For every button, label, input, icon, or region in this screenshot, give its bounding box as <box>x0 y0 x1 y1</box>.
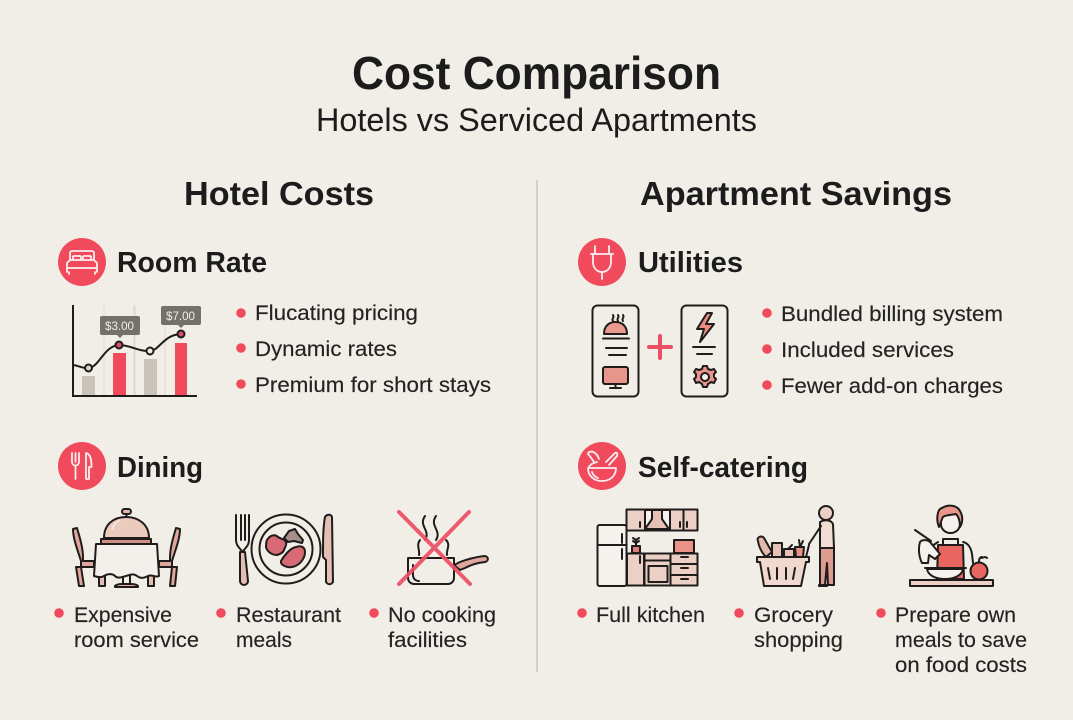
icon: mixing bowl <box>578 442 626 490</box>
icon: room service table <box>73 509 180 587</box>
icon: bed <box>58 238 106 286</box>
list: utilities points: Bundled billing system <box>781 302 1003 326</box>
list: room rate points: Flucating pricing <box>255 301 418 325</box>
icon: cutlery <box>58 442 106 490</box>
icon: crossed out pan <box>399 512 488 584</box>
heading: apartment savings: Apartment Savings <box>640 175 952 212</box>
panel: self-catering <box>577 442 1027 677</box>
chart: fluctuating price: $7.00 <box>166 309 195 323</box>
list: room rate points: Dynamic rates <box>255 337 397 361</box>
list: utilities points: Included services <box>781 338 954 362</box>
list: self-catering points: Grocery <box>754 603 833 627</box>
title: Cost Comparison <box>352 47 721 99</box>
panel: dining <box>54 442 496 652</box>
list: self-catering points: Prepare own <box>895 603 1016 627</box>
list: dining points <box>54 603 496 652</box>
list: dining points: Expensive <box>74 603 172 627</box>
list: dining points: No cooking <box>388 603 496 627</box>
icon: bundled bill cards <box>592 306 728 396</box>
icon: plug <box>578 238 626 286</box>
list: self-catering points <box>577 603 1027 677</box>
list: utilities points: Fewer add-on charges <box>781 374 1003 398</box>
list: utilities points <box>762 302 1003 398</box>
list: self-catering points: meals to save <box>895 628 1027 652</box>
list: dining points: meals <box>236 628 292 652</box>
list: room rate points: Premium for short stays <box>255 373 491 397</box>
list: dining points: room service <box>74 628 199 652</box>
chart: fluctuating price <box>73 305 201 396</box>
subtitle: Hotels vs Serviced Apartments <box>316 102 757 138</box>
icon: kitchen <box>598 510 698 586</box>
icon: grocery shopping <box>757 506 834 586</box>
list: room rate points <box>236 301 491 397</box>
heading: dining: Dining <box>117 452 203 484</box>
list: dining points: Restaurant <box>236 603 341 627</box>
heading: self-catering: Self-catering <box>638 452 808 484</box>
heading: hotel costs: Hotel Costs <box>184 175 374 212</box>
panel: room rate <box>58 238 491 397</box>
heading: utilities: Utilities <box>638 247 743 279</box>
chart: fluctuating price: $3.00 <box>105 319 134 333</box>
list: self-catering points: on food costs <box>895 653 1027 677</box>
heading: room rate: Room Rate <box>117 247 267 279</box>
list: self-catering points: shopping <box>754 628 843 652</box>
list: dining points: facilities <box>388 628 467 652</box>
icon: person cooking <box>910 506 993 586</box>
panel: utilities <box>578 238 1003 398</box>
list: self-catering points: Full kitchen <box>596 603 705 627</box>
icon: plate with fork and knife <box>236 514 333 585</box>
